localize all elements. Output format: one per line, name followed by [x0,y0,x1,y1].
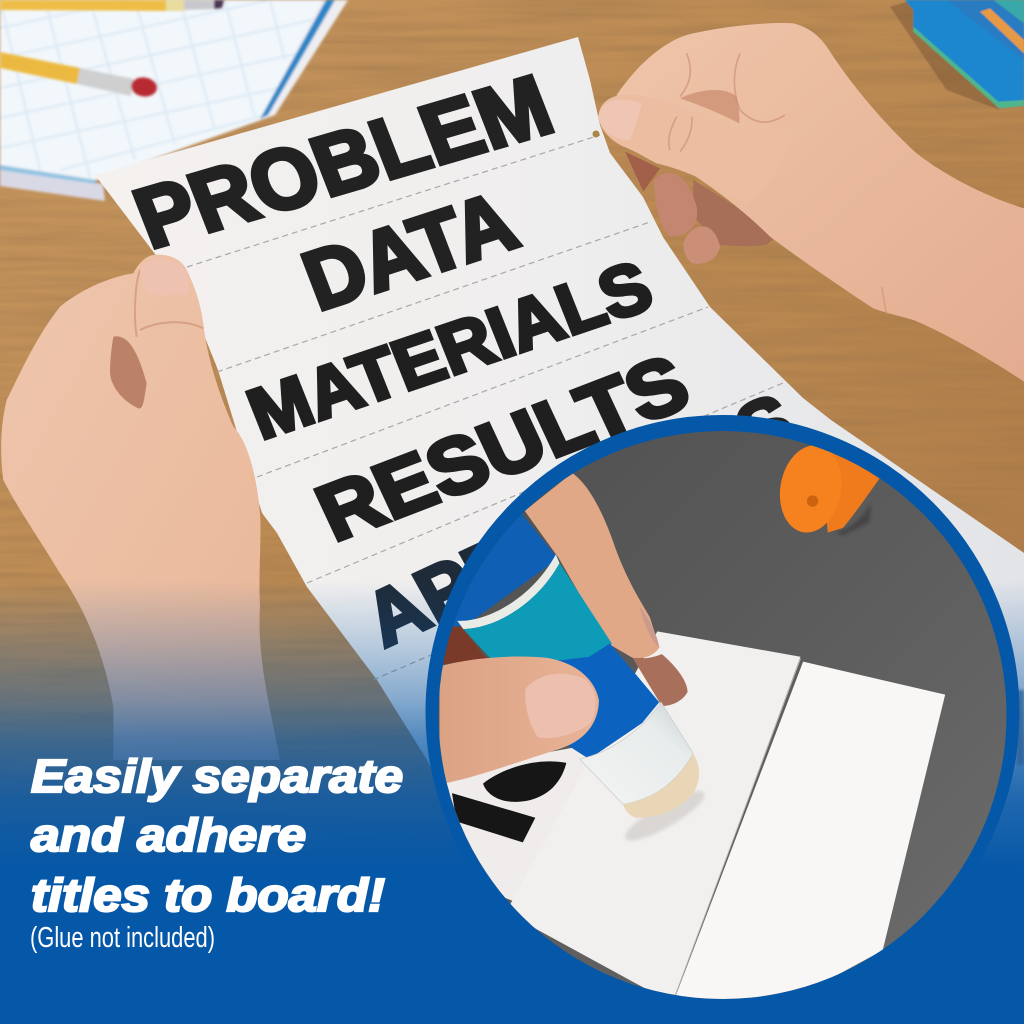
index finger [525,473,660,658]
finger gap shadow [680,90,739,123]
paper sheet: left [506,631,800,1003]
dark desk surface [430,420,1024,1014]
white band [457,554,560,629]
back of hand [441,621,487,664]
thumbnail [598,100,642,140]
markers: top right [890,0,1024,110]
strip title: MATERIALS: MATERIALS [237,246,663,455]
thumbnail [140,259,189,295]
thumbnail [525,674,596,738]
orange glue cap [780,446,880,536]
pencil: eraser end [0,52,158,98]
palm and wrist [617,23,1024,382]
callout circle: glue stick close-up [430,420,1024,1014]
letter fragments [452,761,566,842]
right hand [598,23,1024,382]
strip title: RESULTS: RESULTS [303,337,702,557]
glue shadow on paper [624,790,705,842]
teal section [463,563,612,662]
left hand [1,255,280,760]
fingernail on index [639,606,659,647]
white tip [580,702,693,804]
callout circle ring [432,421,1014,1003]
thumb knuckle [669,117,692,152]
finger shadow gap [110,336,147,409]
thumb [439,657,599,783]
strip title: APP fragment: APP [350,518,538,663]
headline line 3: titles to board! [31,869,385,921]
wrist crease [882,287,887,315]
strip title: DATA: DATA [291,174,529,328]
brass pin at paper corner [592,130,600,138]
blue top [452,514,559,626]
strip title: S fragment: S [723,376,806,478]
blue gradient overlay [0,580,1024,1024]
sheet under with black letters [444,748,586,901]
back fingers [625,152,660,192]
perforation fold line [674,659,800,998]
thumb [598,95,793,203]
thumb crease [135,270,203,337]
blue lower section [558,644,660,757]
headline line 2: and adhere [31,809,306,861]
headline [31,750,403,921]
pencil: top [0,0,224,11]
footnote: (Glue not included) [30,922,215,954]
notebook [0,0,348,201]
right-edge title fragment [1017,690,1024,765]
glue stick body [441,503,699,818]
strip title: PROBLEM: PROBLEM [122,58,565,267]
headline line 1: Easily separate [31,750,403,802]
middle finger [633,654,688,706]
cream glue [623,753,699,818]
paper sheet: right [674,662,945,1011]
